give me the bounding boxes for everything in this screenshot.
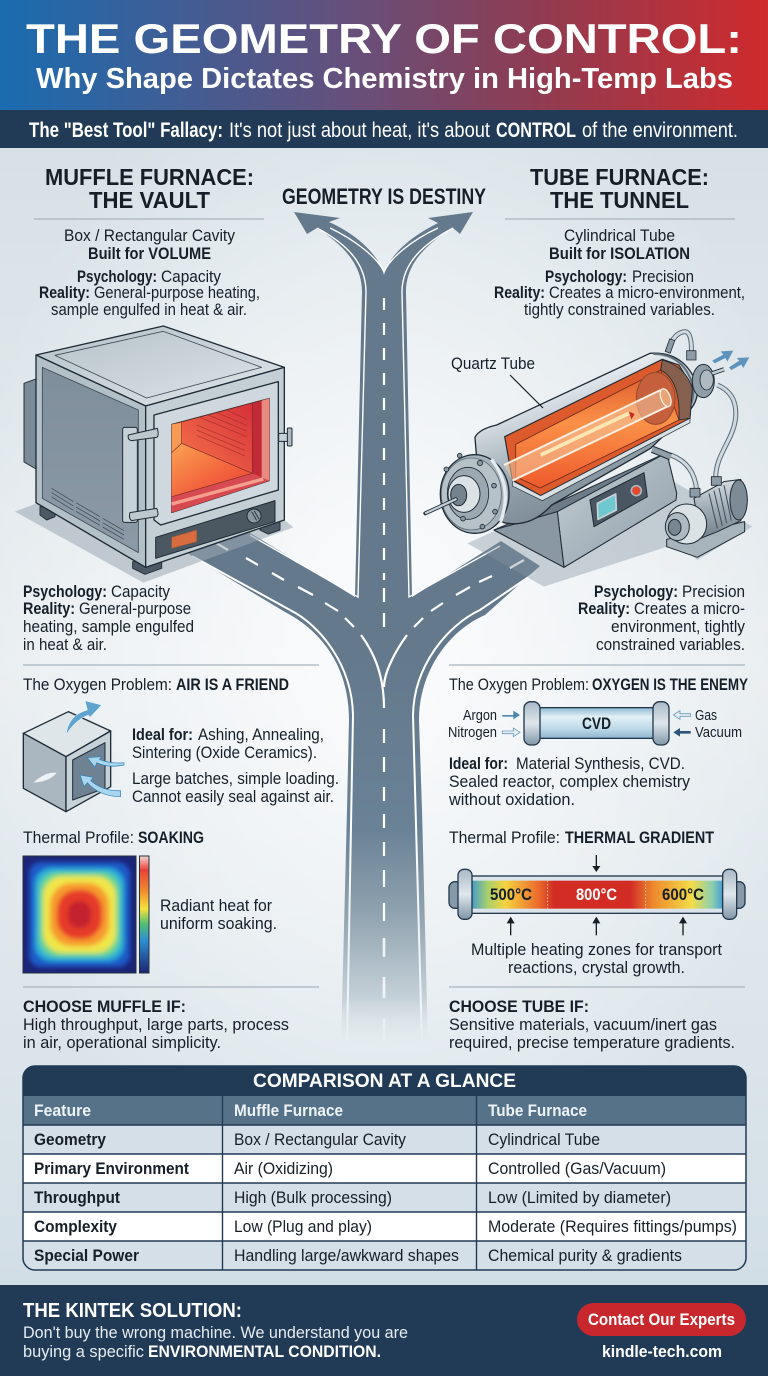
panel: tube intro: Creates a micro-environment, <box>549 283 745 302</box>
tube notes: Precision <box>682 582 745 601</box>
panel: choose muffle: CHOOSE MUFFLE IF: <box>23 997 186 1016</box>
table title: COMPARISON AT A GLANCE <box>253 1071 516 1092</box>
panel: tube thermal profile <box>449 828 745 977</box>
fallacy band: The "Best Tool" Fallacy: <box>29 119 223 142</box>
panel: choose muffle: High throughput, large parts, process <box>23 1015 289 1034</box>
table header <box>34 1101 587 1120</box>
contact button <box>577 1303 746 1336</box>
muffle heading: THE VAULT <box>89 187 210 213</box>
caption: reactions, crystal growth. <box>508 958 685 977</box>
footer <box>0 1285 768 1376</box>
road markings: centre dashes <box>216 298 524 921</box>
muffle heading <box>45 164 254 213</box>
tube notes: Psychology: <box>594 582 678 601</box>
row: special power: Handling large/awkward shapes <box>234 1246 459 1265</box>
panel: tube oxygen problem <box>448 675 749 809</box>
muffle heading: MUFFLE FURNACE: <box>45 164 254 190</box>
tube notes: environment, tightly <box>611 617 745 636</box>
row: primary environment: Controlled (Gas/Vacuum) <box>488 1159 666 1178</box>
diagram: gradient tube <box>449 855 745 935</box>
fallacy band: It's not just about heat, it's about <box>229 119 490 142</box>
tube notes: Reality: <box>578 599 630 618</box>
caption <box>471 940 722 977</box>
caption <box>160 896 277 933</box>
description <box>132 725 339 806</box>
panel: muffle oxygen problem <box>23 675 339 812</box>
icon: open box with airflow <box>23 701 124 812</box>
fallacy band: CONTROL <box>496 119 576 142</box>
panel: choose tube: required, precise temperature gradients. <box>449 1033 735 1052</box>
row: special power: Special Power <box>34 1246 139 1265</box>
description: Sealed reactor, complex chemistry <box>449 772 690 791</box>
diagram: gradient tube: 500°C <box>490 885 532 904</box>
panel: muffle intro: Capacity <box>161 267 221 286</box>
tube notes: Creates a micro- <box>634 599 745 618</box>
row: throughput: High (Bulk processing) <box>234 1188 392 1207</box>
panel: choose muffle <box>23 997 289 1052</box>
row: geometry: Cylindrical Tube <box>488 1130 600 1149</box>
heading: SOAKING <box>138 828 204 847</box>
heading: The Oxygen Problem: <box>23 675 172 694</box>
right flange <box>692 364 714 398</box>
row: geometry: Geometry <box>34 1130 106 1149</box>
heading: Thermal Profile: <box>449 828 560 847</box>
diagram: gradient tube: 800°C <box>576 885 617 904</box>
panel: muffle intro: Box / Rectangular Cavity <box>64 226 235 245</box>
illustration: tube furnace <box>425 332 752 587</box>
tube heading: THE TUNNEL <box>550 187 689 213</box>
row: primary environment <box>34 1159 666 1178</box>
row: throughput <box>34 1188 671 1207</box>
panel: muffle intro: Reality: <box>39 283 90 302</box>
caption: Multiple heating zones for transport <box>471 940 722 959</box>
row: geometry <box>34 1130 600 1149</box>
diagram: sealed CVD tube: Argon <box>463 707 497 724</box>
diagram: sealed CVD tube: Vacuum <box>695 724 742 741</box>
panel: tube intro: Built for ISOLATION <box>549 244 690 263</box>
description <box>448 754 690 809</box>
panel: tube intro <box>494 164 745 319</box>
heading: THERMAL GRADIENT <box>565 828 715 847</box>
heading <box>449 828 715 847</box>
heading: Thermal Profile: <box>23 828 134 847</box>
callout: quartz tube <box>451 354 543 408</box>
panel: muffle intro <box>34 164 264 319</box>
forked road <box>187 212 540 1045</box>
footer text: buying a specific <box>23 1342 144 1361</box>
panel: tube intro: Reality: <box>494 283 545 302</box>
panel: tube intro: Cylindrical Tube <box>564 226 675 245</box>
footer text <box>23 1323 408 1361</box>
footer text: Don't buy the wrong machine. We understand you are <box>23 1323 408 1342</box>
row: complexity <box>34 1217 737 1236</box>
base <box>494 453 677 567</box>
muffle notes: Capacity <box>111 582 170 601</box>
tube notes <box>578 582 745 654</box>
quartz tube <box>504 390 671 481</box>
website: kindle-tech.com <box>602 1342 722 1361</box>
panel: tube intro: Psychology: <box>545 267 627 286</box>
row: special power: Chemical purity & gradients <box>488 1246 682 1265</box>
table header: Tube Furnace <box>488 1101 587 1120</box>
heating window <box>505 359 692 496</box>
side fitting <box>652 449 671 457</box>
caption: uniform soaking. <box>160 914 277 933</box>
fallacy band: of the environment. <box>582 119 738 142</box>
panel: muffle intro: General-purpose heating, <box>94 283 260 302</box>
footer text: ENVIRONMENTAL CONDITION. <box>148 1342 381 1361</box>
left flange <box>440 455 509 533</box>
vacuum pump <box>665 477 747 557</box>
panel: muffle intro: sample engulfed in heat & air. <box>51 300 247 319</box>
description: Large batches, simple loading. <box>132 769 339 788</box>
description: Ideal for: <box>449 754 508 773</box>
panel: tube intro: Precision <box>632 267 694 286</box>
outflow arrows <box>712 351 749 370</box>
heading: AIR IS A FRIEND <box>176 675 289 694</box>
panel: choose tube: CHOOSE TUBE IF: <box>449 997 589 1016</box>
row: geometry: Box / Rectangular Cavity <box>234 1130 406 1149</box>
description: without oxidation. <box>448 790 575 809</box>
description: Ashing, Annealing, <box>198 725 324 744</box>
diagram: sealed CVD tube <box>448 702 742 745</box>
description: Material Synthesis, CVD. <box>516 754 685 773</box>
diagram: sealed CVD tube: Nitrogen <box>448 724 497 741</box>
table header: Muffle Furnace <box>234 1101 343 1120</box>
tube heading <box>530 164 709 213</box>
row: complexity: Moderate (Requires fittings/pumps) <box>488 1217 737 1236</box>
row: complexity: Complexity <box>34 1217 117 1236</box>
muffle notes: Psychology: <box>23 582 107 601</box>
footer heading: THE KINTEK SOLUTION: <box>23 1300 242 1322</box>
body <box>475 353 697 524</box>
panel: choose tube <box>449 997 735 1052</box>
row: complexity: Low (Plug and play) <box>234 1217 372 1236</box>
diagram: gradient tube: 600°C <box>662 885 704 904</box>
panel: muffle intro: Psychology: <box>77 267 157 286</box>
subtitle: Why Shape Dictates Chemistry in High-Temp Labs <box>36 63 733 95</box>
comparison table <box>23 1066 746 1270</box>
road markings: lower edges <box>192 556 536 1045</box>
heading: The Oxygen Problem: <box>449 675 589 694</box>
description: Cannot easily seal against air. <box>132 787 334 806</box>
description: Ideal for: <box>132 725 193 744</box>
callout: quartz tube: Quartz Tube <box>451 354 535 373</box>
row: primary environment: Primary Environment <box>34 1159 189 1178</box>
road markings: fork edges <box>250 228 500 597</box>
muffle notes: General-purpose <box>79 599 191 618</box>
description: Sintering (Oxide Ceramics). <box>132 743 317 762</box>
heading <box>23 675 289 694</box>
fallacy band <box>0 110 768 148</box>
table header: Feature <box>34 1101 91 1120</box>
muffle notes: heating, sample engulfed <box>23 617 194 636</box>
heading: geometry is destiny: GEOMETRY IS DESTINY <box>282 184 486 209</box>
heatmap <box>23 856 136 973</box>
tube notes: constrained variables. <box>596 635 745 654</box>
muffle notes: in heat & air. <box>23 635 107 654</box>
hoses <box>667 332 736 490</box>
panel: tube intro: tightly constrained variables. <box>524 300 715 319</box>
colour scale <box>140 856 149 973</box>
heading <box>23 828 204 847</box>
row: primary environment: Air (Oxidizing) <box>234 1159 333 1178</box>
row: throughput: Low (Limited by diameter) <box>488 1188 671 1207</box>
illustration: muffle furnace <box>15 326 293 583</box>
tube heading: TUBE FURNACE: <box>530 164 709 190</box>
diagram: sealed CVD tube: CVD <box>582 714 611 733</box>
row: special power <box>34 1246 682 1265</box>
row: throughput: Throughput <box>34 1188 120 1207</box>
panel: muffle intro: Built for VOLUME <box>88 244 211 263</box>
diagram: sealed CVD tube: Gas <box>695 707 717 724</box>
muffle notes <box>23 582 194 654</box>
muffle notes: Reality: <box>23 599 75 618</box>
header banner <box>0 0 768 110</box>
heading <box>449 675 749 694</box>
panel: choose muffle: in air, operational simplicity. <box>23 1033 221 1052</box>
contact button: Contact Our Experts <box>588 1310 735 1329</box>
panel: muffle thermal profile <box>23 828 277 973</box>
caption: Radiant heat for <box>160 896 272 915</box>
title: THE GEOMETRY OF CONTROL: <box>26 15 742 62</box>
panel: choose tube: Sensitive materials, vacuum/inert gas <box>449 1015 717 1034</box>
